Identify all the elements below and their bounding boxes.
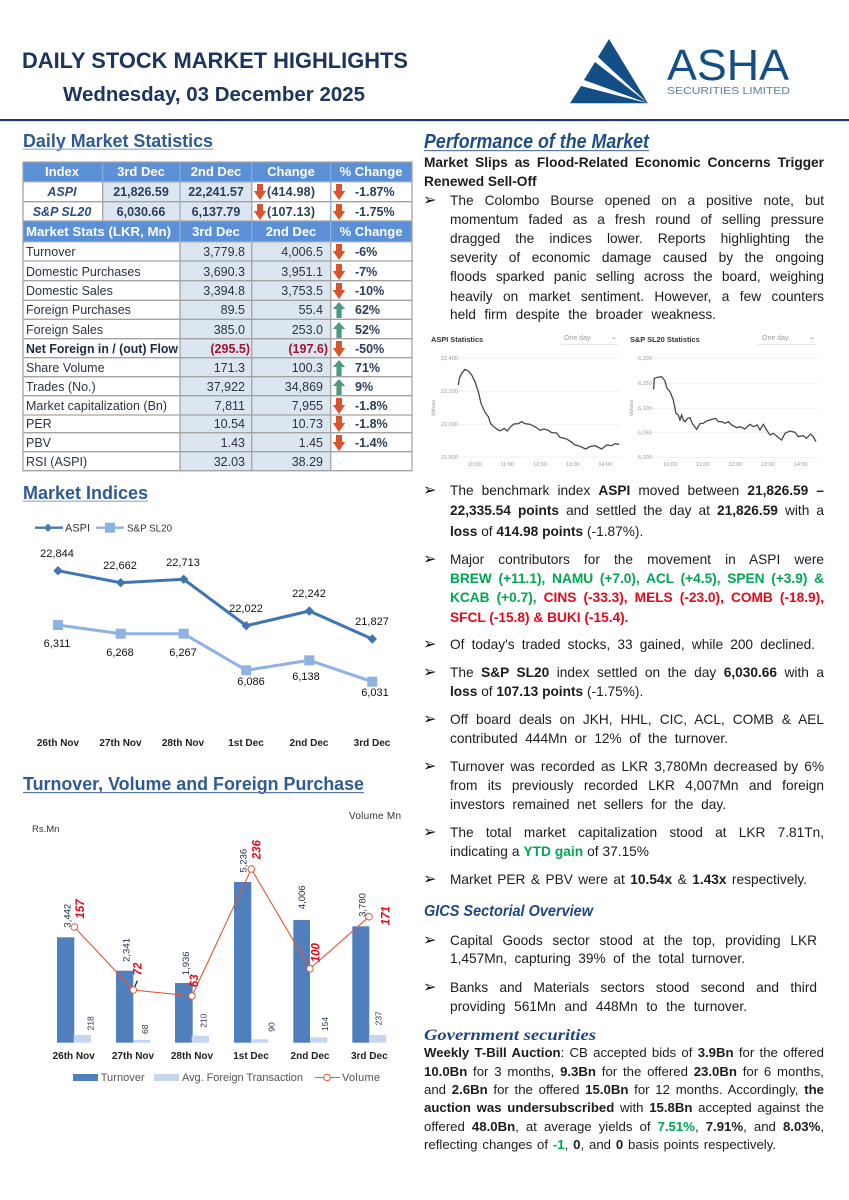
row: Turnover: 3,779.8 bbox=[203, 245, 245, 259]
x axis labels: 2nd Dec bbox=[291, 1051, 330, 1062]
mini chart: ASPI statistics: 10:00 bbox=[468, 462, 482, 468]
row: S&P SL20: 6,030.66 bbox=[117, 205, 165, 219]
series: S&P SL20: 6,268 bbox=[106, 647, 134, 659]
text: ASPI bullet: The benchmark index ASPI moved between 21,826.59 – bbox=[450, 483, 824, 498]
foreign value labels: 218 bbox=[86, 1016, 96, 1030]
mini chart: ASPI statistics: ASPI Statistics bbox=[431, 335, 483, 344]
row: S&P SL20: -1.75% bbox=[355, 205, 395, 219]
axis units: Volume Mn bbox=[349, 811, 401, 822]
turnover value labels: 3,442 bbox=[62, 904, 74, 928]
row: Foreign Sales bbox=[26, 322, 380, 338]
text: off board deals bullet bbox=[423, 709, 824, 746]
text: T-bill auction paragraph: auction was undersubscribed with 15.8Bn accepted against the bbox=[424, 1100, 824, 1115]
text: ➢ bbox=[423, 977, 436, 996]
row: Share Volume bbox=[26, 360, 380, 376]
heading: GICS Sectorial Overview: GICS Sectorial Overview bbox=[424, 903, 594, 920]
series: ASPI: 22,713 bbox=[166, 557, 200, 569]
row: Trades: 9% bbox=[355, 380, 373, 394]
row: Foreign Purchases: Foreign Purchases bbox=[26, 303, 131, 317]
turnover value labels: 5,236 bbox=[238, 849, 250, 873]
row: Foreign Sales: 385.0 bbox=[214, 323, 245, 337]
row: PER: 10.73 bbox=[292, 417, 323, 431]
row: Net Foreign Flow: -50% bbox=[355, 342, 384, 356]
text: capital goods bullet: Capital Goods sector stood at the top, providing LKR bbox=[450, 933, 817, 948]
index header row: Index bbox=[45, 164, 80, 179]
market subheading: Renewed Sell-Off bbox=[424, 174, 537, 189]
legend bbox=[35, 522, 173, 534]
mini chart: S&P SL20 statistics bbox=[629, 335, 818, 468]
text: T-bill auction paragraph: and 2.6Bn for the offered 15.0Bn for 12 months. Accordingly, the bbox=[424, 1082, 824, 1097]
line chart: market indices bbox=[35, 522, 391, 749]
mini chart: S&P SL20 statistics: 6,050 bbox=[638, 430, 652, 436]
row: Share Volume: 71% bbox=[355, 361, 380, 375]
text: turnover bullet: investors remained net sellers for the day. bbox=[450, 797, 726, 812]
text: ➢ bbox=[423, 709, 436, 728]
text: market overview bullet bbox=[423, 190, 824, 322]
mini chart: S&P SL20 statistics: S&P SL20 Statistics bbox=[630, 335, 700, 344]
stats header row: 3rd Dec bbox=[192, 224, 240, 239]
line: volume: 63 bbox=[189, 974, 201, 987]
x axis labels: 2nd Dec bbox=[290, 738, 329, 749]
foreign value labels: 68 bbox=[140, 1024, 150, 1034]
row: Net Foreign Flow: (295.5) bbox=[210, 342, 250, 356]
x axis labels bbox=[53, 1051, 388, 1062]
row: RSI: 38.29 bbox=[292, 455, 323, 469]
text: off board deals bullet: Off board deals on JKH, HHL, CIC, ACL, COMB & AEL bbox=[450, 712, 824, 727]
mini chart: S&P SL20 statistics: 10:00 bbox=[663, 462, 677, 468]
heading: Government securities: Government securities bbox=[424, 1027, 596, 1044]
row: Trades: 37,922 bbox=[207, 380, 245, 394]
row: Foreign Sales: 52% bbox=[355, 323, 380, 337]
x axis labels: 3rd Dec bbox=[354, 738, 391, 749]
index header row: 3rd Dec bbox=[117, 164, 165, 179]
row: Market capitalization bbox=[26, 398, 388, 414]
row: S&P SL20: S&P SL20 bbox=[33, 205, 91, 219]
row: Share Volume: 171.3 bbox=[214, 361, 245, 375]
text: banks and materials bullet: Banks and Materials sectors stood second and third bbox=[450, 980, 817, 995]
text: banks and materials bullet bbox=[423, 977, 817, 1014]
mini chart: ASPI statistics: 13:00 bbox=[566, 462, 580, 468]
logo: Asha Securities: SECURITIES LIMITED bbox=[667, 85, 790, 97]
row: ASPI bbox=[46, 184, 395, 200]
text: T-bill auction paragraph bbox=[424, 1045, 824, 1152]
row: Turnover: 4,006.5 bbox=[281, 245, 323, 259]
row: Domestic Purchases: 3,951.1 bbox=[281, 265, 323, 279]
text: capital goods bullet bbox=[423, 930, 817, 966]
row: Share Volume: Share Volume bbox=[26, 361, 105, 375]
row: Domestic Sales: 3,753.5 bbox=[281, 284, 323, 298]
heading: Market Indices: Market Indices bbox=[23, 483, 148, 503]
stats header row: Market Stats (LKR, Mn) bbox=[26, 224, 171, 239]
text: turnover bullet bbox=[423, 756, 824, 812]
series: S&P SL20: 6,138 bbox=[292, 671, 320, 683]
row: Net Foreign Flow: (197.6) bbox=[288, 342, 328, 356]
row: Foreign Purchases: 62% bbox=[355, 303, 380, 317]
row: Domestic Purchases bbox=[26, 264, 377, 280]
text: ➢ bbox=[423, 549, 436, 568]
text: off board deals bullet: contributed 444Mn or 12% of the turnover. bbox=[450, 731, 728, 746]
text: gainers and decliners bullet: Of today's traded stocks, 33 gained, while 200 declined. bbox=[450, 637, 815, 652]
text: T-bill auction paragraph: Weekly T-Bill Auction: CB accepted bids of 3.9Bn for the offered bbox=[424, 1045, 824, 1060]
text: turnover bullet: Turnover was recorded as LKR 3,780Mn decreased by 6% bbox=[450, 759, 824, 774]
text: ➢ bbox=[423, 662, 436, 681]
turnover value labels bbox=[62, 849, 368, 975]
mini chart: ASPI statistics: 21,800 bbox=[441, 455, 458, 461]
mini chart: S&P SL20 statistics: 12:00 bbox=[728, 462, 742, 468]
row: Domestic Sales: 3,394.8 bbox=[203, 284, 245, 298]
text: ➢ bbox=[423, 756, 436, 775]
row: Trades bbox=[26, 379, 373, 395]
logo: Asha Securities: ASHA bbox=[667, 41, 790, 90]
row: Trades: Trades (No.) bbox=[26, 380, 96, 394]
row: RSI: RSI (ASPI) bbox=[26, 455, 87, 469]
heading: Turnover, Volume and Foreign Purchase: Turnover, Volume and Foreign Purchase bbox=[23, 774, 364, 794]
line: volume: 72 bbox=[133, 962, 145, 975]
text: capital goods bullet: 1,457Mn, capturing 39% of the total turnover. bbox=[450, 951, 745, 966]
text: ➢ bbox=[423, 190, 436, 209]
row: Domestic Purchases: Domestic Purchases bbox=[26, 265, 141, 279]
row: ASPI: (414.98) bbox=[267, 185, 315, 199]
stats header row: % Change bbox=[340, 224, 402, 239]
row: PBV: PBV bbox=[26, 436, 52, 450]
row: ASPI: 21,826.59 bbox=[113, 185, 169, 199]
text: T-bill auction paragraph: offered 48.0Bn, at average yields of 7.51%, 7.91%, and 8.03%, bbox=[424, 1119, 824, 1134]
row: S&P SL20: 6,137.79 bbox=[192, 205, 240, 219]
logo: Asha Securities bbox=[570, 39, 790, 103]
text: ➢ bbox=[423, 822, 436, 841]
series: ASPI: 22,662 bbox=[103, 560, 137, 572]
row: Domestic Sales: Domestic Sales bbox=[26, 284, 113, 298]
foreign value labels: 90 bbox=[267, 1022, 277, 1032]
text: banks and materials bullet: providing 561Mn and 448Mn to the turnover. bbox=[450, 999, 747, 1014]
x axis labels: 26th Nov bbox=[53, 1051, 95, 1062]
x axis labels: 27th Nov bbox=[112, 1051, 155, 1062]
series: ASPI: 22,844 bbox=[40, 548, 74, 560]
text: market capitalization bullet bbox=[423, 822, 824, 859]
row: S&P SL20: (107.13) bbox=[267, 205, 315, 219]
mini chart: S&P SL20 statistics: 6,000 bbox=[638, 455, 652, 461]
row: Domestic Sales bbox=[26, 283, 384, 299]
mini chart: ASPI statistics: 22,400 bbox=[441, 356, 458, 362]
series: ASPI: 22,242 bbox=[292, 588, 326, 600]
row: Trades: 34,869 bbox=[285, 380, 323, 394]
x axis labels: 28th Nov bbox=[171, 1051, 214, 1062]
text: market overview bullet: heavily on market sentiment. However, a few counters bbox=[450, 289, 824, 304]
row: Foreign Purchases: 89.5 bbox=[221, 303, 245, 317]
text: market overview bullet: The Colombo Bourse opened on a positive note, but bbox=[450, 193, 824, 208]
heading: Performance of the Market: Performance of the Market bbox=[424, 131, 650, 153]
text: market overview bullet: dragged the indices lower. Reports highlighting the bbox=[450, 231, 824, 246]
row: Market capitalization: Market capitalization (Bn) bbox=[26, 399, 167, 413]
axis units bbox=[32, 811, 401, 835]
row: PBV bbox=[26, 435, 388, 451]
mini chart: ASPI statistics: 14:00 bbox=[598, 462, 612, 468]
stats header row bbox=[26, 224, 402, 239]
mini chart: ASPI statistics: One day bbox=[564, 335, 591, 342]
text: S&P SL20 bullet bbox=[423, 662, 824, 699]
text: market overview bullet: severity of economic damage caused by the ongoing bbox=[450, 250, 824, 265]
row: ASPI: ASPI bbox=[46, 185, 77, 199]
text: market overview bullet: momentum faded as a fresh round of selling pressure bbox=[450, 212, 824, 227]
text: turnover bullet: from its previously recorded LKR 4,007Mn and foreign bbox=[450, 778, 824, 793]
text: market capitalization bullet: The total market capitalization stood at LKR 7.81Tn, bbox=[450, 825, 824, 840]
series: S&P SL20: 6,311 bbox=[44, 638, 70, 650]
x axis labels bbox=[37, 738, 391, 749]
x axis labels: 27th Nov bbox=[99, 738, 142, 749]
market subheading bbox=[424, 155, 824, 189]
text: ASPI bullet: 22,335.54 points and settled the day at 21,826.59 with a bbox=[450, 503, 824, 518]
text: ASPI bullet: loss of 414.98 points (-1.87%). bbox=[450, 524, 643, 539]
heading: Daily Market Statistics: Daily Market Statistics bbox=[23, 131, 213, 151]
turnover value labels: 4,006 bbox=[297, 885, 308, 909]
turnover value labels: 2,341 bbox=[122, 938, 132, 962]
mini chart: S&P SL20 statistics: Values bbox=[629, 400, 635, 416]
text: contributors bullet: SFCL (-15.8) & BUKI (-15.4). bbox=[450, 610, 628, 625]
row: PER bbox=[26, 416, 388, 432]
row: PBV: -1.4% bbox=[355, 436, 388, 450]
foreign value labels: 237 bbox=[373, 1011, 383, 1025]
line: volume: 100 bbox=[311, 943, 323, 962]
x axis labels: 28th Nov bbox=[162, 738, 205, 749]
bars: foreign transactions bbox=[74, 1035, 386, 1043]
index header row: Change bbox=[267, 164, 315, 179]
row: Net Foreign Flow: Net Foreign in / (out) Flow bbox=[26, 342, 178, 356]
row: Market capitalization: 7,811 bbox=[215, 399, 245, 413]
row: RSI: 32.03 bbox=[214, 455, 245, 469]
series: ASPI: 21,827 bbox=[355, 616, 389, 628]
legend: Volume bbox=[342, 1072, 380, 1084]
text: contributors bullet: BREW (+11.1), NAMU (+7.0), ACL (+4.5), SPEN (+3.9) & bbox=[450, 571, 824, 586]
row: Domestic Purchases: 3,690.3 bbox=[203, 265, 245, 279]
legend bbox=[73, 1072, 380, 1084]
x axis labels: 26th Nov bbox=[37, 738, 80, 749]
mini chart: ASPI statistics: 11:00 bbox=[501, 462, 514, 468]
mini chart: S&P SL20 statistics: 11:00 bbox=[696, 462, 709, 468]
row: PER: -1.8% bbox=[355, 417, 388, 431]
mini chart: ASPI statistics: Values bbox=[431, 400, 437, 416]
foreign value labels bbox=[86, 1011, 383, 1034]
row: Turnover: -6% bbox=[355, 245, 377, 259]
row: Foreign Sales: Foreign Sales bbox=[26, 323, 103, 337]
series: ASPI bbox=[40, 548, 389, 644]
series: ASPI: 22,022 bbox=[229, 603, 263, 615]
row: S&P SL20 bbox=[33, 204, 395, 220]
text: PER and PBV bullet: Market PER & PBV were at 10.54x & 1.43x respectively. bbox=[450, 872, 807, 887]
text: market overview bullet: held firm despite the broader weakness. bbox=[450, 307, 716, 322]
row: Domestic Purchases: -7% bbox=[355, 265, 377, 279]
mini chart: S&P SL20 statistics: 6,150 bbox=[638, 381, 652, 387]
row: Turnover bbox=[26, 244, 377, 260]
foreign value labels: 210 bbox=[198, 1013, 208, 1028]
text: ➢ bbox=[423, 634, 436, 653]
text: ASPI bullet bbox=[423, 480, 824, 539]
stats header row: 2nd Dec bbox=[266, 224, 316, 239]
line: volume bbox=[71, 840, 393, 999]
text: S&P SL20 bullet: loss of 107.13 points (-1.75%). bbox=[450, 684, 643, 699]
row: Market capitalization: -1.8% bbox=[355, 399, 388, 413]
row: Net Foreign Flow bbox=[26, 341, 384, 357]
index header row bbox=[45, 164, 402, 179]
mini chart: S&P SL20 statistics: 6,100 bbox=[638, 406, 652, 412]
title: DAILY STOCK MARKET HIGHLIGHTS bbox=[22, 48, 408, 73]
series: S&P SL20: 6,031 bbox=[361, 687, 389, 699]
mini chart: ASPI statistics: 22,200 bbox=[441, 389, 458, 395]
statistics table bbox=[23, 162, 412, 471]
mini chart: S&P SL20 statistics: 14:00 bbox=[794, 462, 808, 468]
row: PER: 10.54 bbox=[214, 417, 245, 431]
series: S&P SL20 bbox=[44, 620, 389, 699]
legend: ASPI bbox=[65, 522, 90, 534]
row: Domestic Sales: -10% bbox=[355, 284, 384, 298]
x axis labels: 3rd Dec bbox=[351, 1051, 388, 1062]
mini chart: S&P SL20 statistics: 13:00 bbox=[761, 462, 775, 468]
text: contributors bullet: Major contributors for the movement in ASPI were bbox=[450, 552, 824, 567]
axis units: Rs.Mn bbox=[32, 824, 59, 835]
combo chart: turnover, foreign and volume bbox=[32, 811, 401, 1084]
text: ➢ bbox=[423, 869, 436, 888]
row: Foreign Purchases: 55.4 bbox=[299, 303, 323, 317]
bars: turnover bbox=[57, 882, 369, 1043]
legend: Turnover bbox=[101, 1072, 145, 1084]
row: Turnover: Turnover bbox=[26, 245, 76, 259]
text: T-bill auction paragraph: 10.0Bn for 3 months, 9.3Bn for the offered 23.0Bn for 6 months, bbox=[424, 1064, 824, 1079]
row: Foreign Purchases bbox=[26, 302, 380, 318]
line: volume: 157 bbox=[75, 899, 87, 919]
row: ASPI: -1.87% bbox=[355, 185, 395, 199]
legend: Avg. Foreign Transaction bbox=[182, 1072, 303, 1084]
text: T-bill auction paragraph: reflecting changes of -1, 0, and 0 basis points respectively. bbox=[424, 1137, 776, 1152]
index header row: % Change bbox=[340, 164, 402, 179]
row: PER: PER bbox=[26, 417, 52, 431]
mini chart: S&P SL20 statistics: 6,200 bbox=[638, 356, 652, 362]
mini chart: ASPI statistics: 22,000 bbox=[441, 422, 458, 428]
text: contributors bullet: KCAB (+0.7), CINS (-33.3), MELS (-23.0), COMB (-18.9), bbox=[450, 590, 824, 605]
row: Share Volume: 100.3 bbox=[292, 361, 323, 375]
legend: S&P SL20 bbox=[127, 524, 173, 534]
text: ➢ bbox=[423, 930, 436, 949]
text: market overview bullet: floods sparked panic selling across the board, weighing bbox=[450, 269, 824, 284]
text: market capitalization bullet: indicating a YTD gain of 37.15% bbox=[450, 844, 649, 859]
text: ➢ bbox=[423, 480, 436, 499]
turnover value labels: 3,780 bbox=[358, 893, 368, 917]
row: Market capitalization: 7,955 bbox=[292, 399, 323, 413]
index header row: 2nd Dec bbox=[191, 164, 241, 179]
row: PBV: 1.45 bbox=[299, 436, 323, 450]
row: Foreign Sales: 253.0 bbox=[292, 323, 323, 337]
date subtitle: Wednesday, 03 December 2025 bbox=[63, 84, 365, 106]
x axis labels: 1st Dec bbox=[233, 1051, 269, 1062]
series: S&P SL20: 6,267 bbox=[169, 647, 197, 659]
turnover value labels: 1,936 bbox=[181, 951, 192, 975]
row: RSI bbox=[26, 455, 323, 469]
row: PBV: 1.43 bbox=[221, 436, 245, 450]
series: S&P SL20: 6,086 bbox=[237, 676, 265, 688]
text: contributors bullet bbox=[423, 549, 824, 625]
mini chart: S&P SL20 statistics: One day bbox=[762, 335, 789, 342]
mini chart: ASPI statistics: 12:00 bbox=[533, 462, 547, 468]
mini chart: ASPI statistics bbox=[431, 335, 620, 468]
x axis labels: 1st Dec bbox=[228, 738, 264, 749]
text: S&P SL20 bullet: The S&P SL20 index settled on the day 6,030.66 with a bbox=[450, 665, 824, 680]
line: volume: 236 bbox=[251, 840, 263, 860]
line: volume: 171 bbox=[381, 906, 393, 925]
market subheading: Market Slips as Flood-Related Economic Concerns Trigger bbox=[424, 155, 824, 170]
row: ASPI: 22,241.57 bbox=[188, 185, 244, 199]
foreign value labels: 154 bbox=[320, 1017, 330, 1031]
